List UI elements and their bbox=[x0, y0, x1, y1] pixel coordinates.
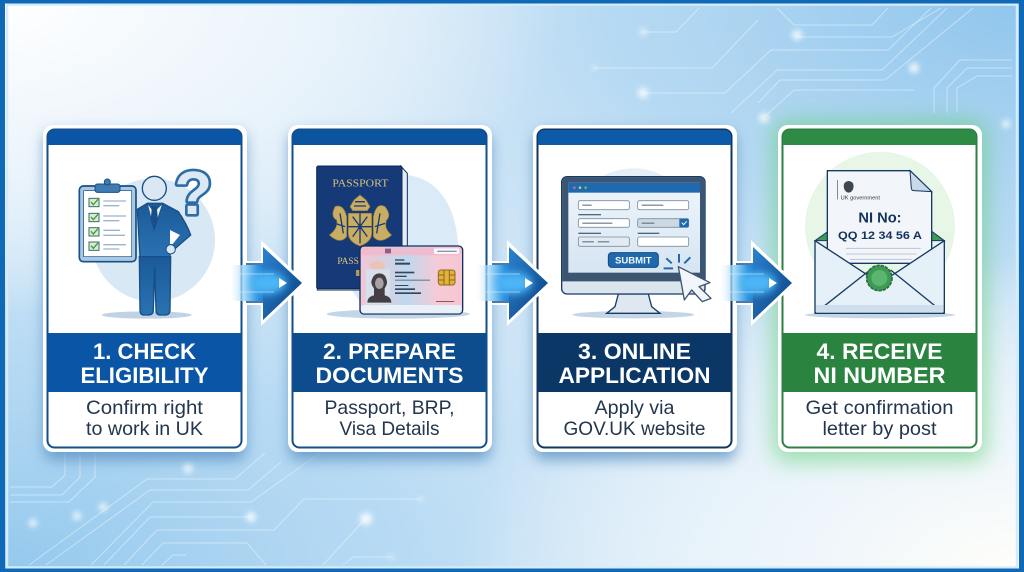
arrow: step 2 to step 3 bbox=[476, 240, 552, 326]
heading: NI NUMBER bbox=[814, 363, 946, 388]
panel: step 3 online application bbox=[533, 125, 737, 460]
circuit pattern: top right bbox=[594, 8, 1012, 117]
icon: letter in envelope: QQ 12 34 56 A bbox=[838, 230, 922, 242]
heading: APPLICATION bbox=[558, 363, 710, 388]
icon: passport and BRP card: PASS bbox=[337, 257, 359, 267]
arrow: step 1 to step 2 bbox=[230, 240, 306, 326]
heading: 2. PREPARE bbox=[323, 339, 456, 364]
icon: passport and BRP card: PASSPORT bbox=[332, 179, 388, 190]
icon: letter in envelope: NI No: bbox=[858, 210, 902, 226]
icon: passport and BRP card bbox=[317, 166, 470, 319]
icon: computer with form bbox=[562, 168, 711, 318]
heading: ELIGIBILITY bbox=[80, 363, 209, 388]
title band bbox=[538, 333, 731, 392]
description: GOV.UK website bbox=[564, 418, 706, 440]
heading: 3. ONLINE bbox=[578, 339, 691, 364]
description: Visa Details bbox=[340, 418, 440, 440]
panel: step 2 prepare documents bbox=[288, 125, 492, 460]
arrow: step 3 to step 4 bbox=[720, 240, 796, 326]
description: Passport, BRP, bbox=[324, 397, 454, 419]
description: Apply via bbox=[594, 397, 675, 419]
heading: DOCUMENTS bbox=[316, 363, 464, 388]
title band bbox=[783, 333, 976, 392]
description: Confirm right bbox=[86, 397, 204, 419]
heading: 4. RECEIVE bbox=[816, 339, 942, 364]
panel: step 4 receive NI number bbox=[773, 120, 987, 462]
panel: step 1 check eligibility bbox=[43, 125, 247, 460]
title band bbox=[293, 333, 486, 392]
circuit pattern: bottom left bbox=[10, 453, 421, 565]
icon: letter in envelope: UK government bbox=[841, 195, 880, 201]
title band bbox=[48, 333, 241, 392]
description: to work in UK bbox=[86, 418, 203, 440]
icon: computer with form: SUBMIT bbox=[615, 255, 652, 265]
icon: person with checklist bbox=[79, 159, 215, 319]
description: letter by post bbox=[822, 418, 937, 440]
heading: 1. CHECK bbox=[93, 339, 196, 364]
icon: letter in envelope bbox=[805, 152, 955, 318]
icon: person with checklist: ? bbox=[174, 159, 212, 228]
description: Get confirmation bbox=[806, 397, 954, 419]
